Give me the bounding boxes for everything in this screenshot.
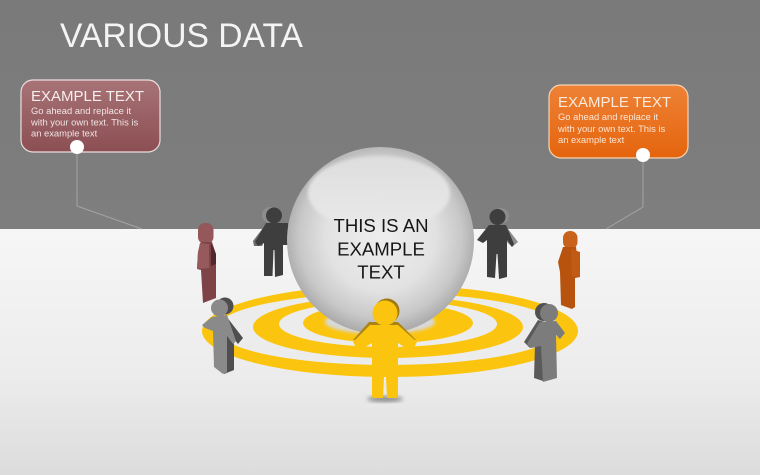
- connector line: right callout: [606, 160, 643, 229]
- figure: maroon side view: [197, 223, 216, 303]
- callout: orange: with your own text. This is: [557, 123, 665, 134]
- sphere label: THIS IS AN: [333, 215, 429, 236]
- callout: maroon: EXAMPLE TEXT: [31, 88, 144, 105]
- background floor: [0, 229, 760, 475]
- callout: orange: EXAMPLE TEXT: [558, 94, 671, 111]
- marker dot: [636, 148, 650, 162]
- figure: dark back right: [477, 208, 518, 279]
- connector line: left callout: [77, 152, 142, 229]
- callout: orange: Go ahead and replace it: [558, 111, 658, 122]
- callout: orange: [549, 85, 688, 162]
- figure: yellow front: [353, 298, 417, 402]
- figure: orange side view: [558, 231, 580, 309]
- concentric target rings: [202, 285, 578, 377]
- figure: dark back left: [253, 207, 288, 277]
- callout: maroon: with your own text. This is: [30, 116, 138, 128]
- background wall: [0, 0, 760, 229]
- marker dot: [70, 140, 84, 154]
- callout: maroon: [21, 80, 160, 154]
- sphere: EXAMPLE: [337, 238, 425, 260]
- figure: gray front left: [202, 298, 243, 374]
- sphere body: [287, 147, 474, 334]
- title: VARIOUS DATA: [60, 17, 303, 55]
- callout: orange: an example text: [558, 134, 625, 145]
- figure: gray front right: [524, 303, 565, 382]
- sphere: [287, 147, 474, 334]
- sphere gloss highlight: [308, 156, 450, 230]
- callout: maroon: Go ahead and replace it: [31, 105, 131, 116]
- callout: maroon: an example text: [31, 128, 98, 138]
- sphere: TEXT: [357, 262, 405, 282]
- ground shadow: [367, 396, 403, 402]
